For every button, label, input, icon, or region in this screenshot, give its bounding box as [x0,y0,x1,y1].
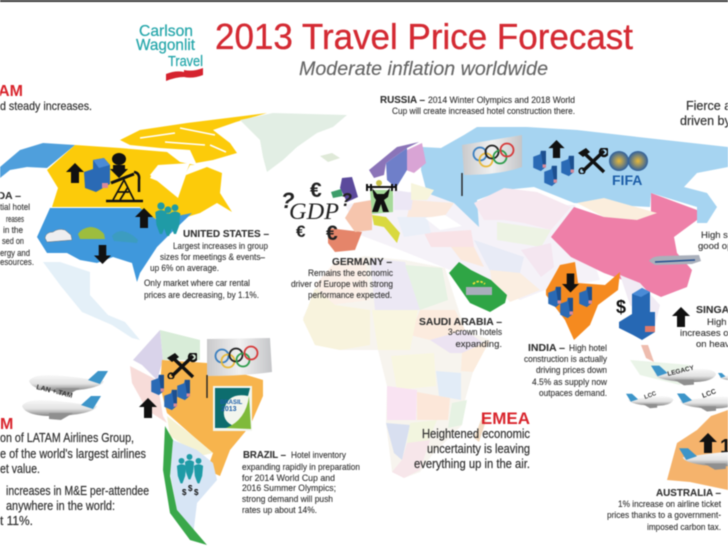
map: Chad [372,310,418,350]
icon: US down arrow [94,245,111,264]
icon: Confederations Cup logo: 2013 [221,406,237,413]
map: Canada Arctic islands [120,113,267,163]
map: Zambia [417,392,450,420]
map: France [345,200,372,232]
NORAM heading [0,83,92,113]
icon: Canada buildings and arrow [66,158,110,192]
icon: GDP and euro symbols: ? [341,190,352,210]
EMEA callout: EMEA [481,409,530,428]
LATAM text: e of the world's largest airlines [0,447,146,461]
map: Madagascar [474,418,487,442]
icon: high speed train [649,255,701,265]
icon: India hotels with down arrow [548,274,592,318]
icon: Southeast Asia buildings and dollar: $ [616,297,626,317]
map: Greenland [240,113,347,172]
Russia text: Cup will create increased hotel construction there. [392,106,575,117]
icon: LAN and TAM planes: LAN + TAM [36,384,73,400]
map: West Africa [303,288,370,350]
title: 2013 Travel Price Forecast [215,16,633,57]
Canada text: tial hotel [0,202,30,213]
icon: Brazil Olympic flag [207,338,272,398]
map: Central Asia [497,222,551,247]
Singapore text [680,304,728,350]
LATAM text: anywhere in the world: [6,499,115,513]
icon: Canada up arrow [66,163,84,183]
map: Turkey [424,230,474,247]
LATAM text [0,416,149,528]
icon: GDP and euro symbols: GDP [289,199,339,224]
Russia text: 2014 Winter Olympics and 2018 World [428,95,575,106]
China text [698,230,728,252]
Saudi Arabia text [419,316,502,350]
icon: Saudi three-crown hotel [466,282,492,295]
map: United States [37,208,192,282]
icon: Confederations Cup logo: BRASIL [220,400,243,406]
LATAM text: et value. [0,462,40,476]
map: Baltics [411,183,434,200]
map: China [551,193,697,297]
United States text: UNITED STATES – [183,228,269,240]
Brazil text: Hotel inventory [291,450,346,461]
Brazil text: strong demand will push [242,494,333,505]
Brazil text: 2016 Summer Olympics; [242,483,336,494]
map: Australia [667,410,728,490]
Russia text: RUSSIA – [380,94,425,106]
icon: people with dollar signs [177,454,203,497]
Saudi Arabia text: expanding. [456,339,502,350]
map: Finland [406,143,426,173]
icon: people with dollar signs: $ [194,488,199,497]
map: Pakistan [521,243,554,277]
India text: driving prices down [536,365,607,376]
LATAM text: t 11%. [0,514,33,528]
NORAM heading: d steady increases. [0,99,92,113]
icon: LEGACY and LCC planes [626,364,728,412]
map: South Africa [392,440,430,478]
map: Egypt [405,265,448,310]
LATAM text: increases in M&E per-attendee [6,484,149,498]
icon: LEGACY and LCC planes: LCC [701,388,717,400]
map: Poland [394,190,414,210]
map: Black Sea [425,215,462,230]
United States text [144,228,269,301]
map: Kenya and Tanzania [436,371,461,400]
Germany text: Remains the economic [308,268,393,279]
map: Ukraine [407,200,454,217]
icon: weightlifter [367,180,396,212]
Canada text: ergy and [0,248,30,259]
icon: GDP and euro symbols: € [296,222,306,241]
icon: Southeast Asia buildings and dollar [616,288,655,340]
map: Iceland [320,153,340,162]
Germany text: performance expected. [308,290,392,301]
icon: Russia Olympic flag [462,135,522,196]
icon: Russia tools [578,148,608,174]
map: Kazakhstan [474,188,571,230]
United States text: up 6% on average. [150,263,219,274]
map: Libya [370,258,420,310]
Germany text: driver of Europe with strong [291,279,393,290]
icon: Australia arrow and plane [679,433,728,470]
Saudi Arabia text: SAUDI ARABIA – [419,316,502,328]
map: Malay peninsula [641,345,654,362]
map: Sweden [386,148,407,188]
EMEA callout: Heightened economic [422,427,530,441]
icon: people with dollar signs: $ [188,484,193,493]
icon: GDP and euro symbols: € [326,222,338,245]
logo: Carlson Wagonlit Travel: Wagonlit [136,37,196,54]
Brazil text: for 2014 World Cup and [242,473,335,484]
Saudi Arabia text: 3-crown hotels [448,327,502,338]
icon: LEGACY and LCC planes: LCC [644,391,658,401]
map: Saudi Arabia [449,262,507,312]
map: Germany [370,190,393,214]
icon: light bulb down [110,153,128,178]
map: India [546,262,620,340]
EMEA callout [414,409,530,471]
India text [524,342,607,399]
Russia text [380,94,575,117]
Australia text: AUSTRALIA – [656,487,721,499]
map: Bolivia [167,416,213,456]
icon: LAN and TAM planes [22,371,108,420]
LATAM text: M [0,416,13,433]
Germany text [291,256,393,301]
map: Chile [163,426,207,545]
icon: oil pump [106,172,143,201]
map: Argentina [170,440,217,536]
map: Ethiopia [430,330,482,353]
map: Congo [391,353,436,390]
map: United Kingdom [340,177,358,202]
icon: Singapore up arrow [672,307,690,327]
map: Southeast Asia [620,275,660,325]
United States text: sizes for meetings & events– [160,252,266,263]
United States text: prices are decreasing, by 1.1%. [144,290,259,301]
map: Hudson Bay [150,163,190,198]
top edge bar [0,0,728,2]
map: Mexico and Central America [43,262,140,340]
Brazil text: rates up about 14%. [242,505,317,516]
Canada text: in the [3,225,23,236]
map: Mongolia [577,198,657,220]
Canada text [0,190,34,268]
icon: GDP and euro symbols: € [310,179,322,202]
India text: construction is actually [524,354,607,365]
icon: Confederations Cup logo [213,386,252,431]
icon: people with dollar signs: $ [182,488,187,497]
map: Iran and neighbours [474,240,524,273]
icon: Brazil tools [167,353,197,379]
map: Russia [421,127,728,227]
Pacific text [680,99,728,128]
map: Norway [369,142,419,178]
India text: outpaces demand. [539,388,607,399]
map: Canada mainland [47,145,232,227]
EMEA callout: everything up in the air. [414,457,530,471]
icon: FIFA globes: FIFA [612,172,642,188]
map: Africa underlay [303,256,490,478]
icon: GDP and euro symbols: ? [281,188,294,213]
subtitle: Moderate inflation worldwide [299,59,548,80]
map: Sudan [410,310,465,340]
India text: 4.5% as supply now [532,377,607,388]
Brazil text [242,449,360,516]
map: Ireland [331,189,343,198]
map: Colombia [133,330,163,380]
map: Angola [387,386,417,420]
Canada text: esources. [0,257,34,268]
logo: Carlson Wagonlit Travel: Travel [168,53,203,70]
Brazil text: BRAZIL – [243,449,286,461]
map: Indonesia [630,360,690,385]
map: Eurasia underlay [345,190,600,300]
icon: FIFA globes [609,151,648,188]
United States text: Largest increases in group [173,241,268,252]
icon: Brazil hotels with arrow [139,375,190,418]
Brazil text: expanding rapidly in preparation [242,462,360,473]
map: Mozambique [448,400,467,428]
EMEA callout: uncertainty is leaving [427,442,530,456]
map: Venezuela [160,330,200,360]
map: Iraq [451,247,484,267]
Australia text [607,487,721,533]
logo: Carlson Wagonlit Travel: Carlson [139,23,193,40]
map: Spain [328,228,362,252]
map: Peru [130,366,167,423]
map: Italy [372,215,400,243]
map: Arctic channels [140,128,226,152]
map: Balkans [397,217,431,237]
map: Brazil [160,360,263,476]
Canada text: reases [6,214,24,225]
logo: Carlson Wagonlit Travel [136,23,203,81]
Canada text: sed on [2,236,24,247]
icon: LEGACY and LCC planes: LEGACY [667,364,695,378]
icon: GDP and euro symbols [281,179,352,245]
map: Arabian coast [490,270,540,302]
map: Alaska [0,143,75,178]
map: Somalia [461,340,490,372]
icon: rental cars [45,227,138,243]
map: Namibia [386,423,410,460]
map: Morocco and Algeria [315,258,370,305]
United States text: Only market where car rental [144,278,250,289]
world map [0,113,728,545]
icon: Russia hotels with arrow [533,140,574,186]
map: Botswana [407,420,437,443]
icon: teal meeting group [155,202,180,236]
Germany text: GERMANY – [332,256,392,268]
India text: INDIA – [528,342,565,354]
icon: US up arrow [135,208,153,228]
LATAM text: on of LATAM Airlines Group, [0,431,134,445]
India text: High hotel [569,343,607,354]
